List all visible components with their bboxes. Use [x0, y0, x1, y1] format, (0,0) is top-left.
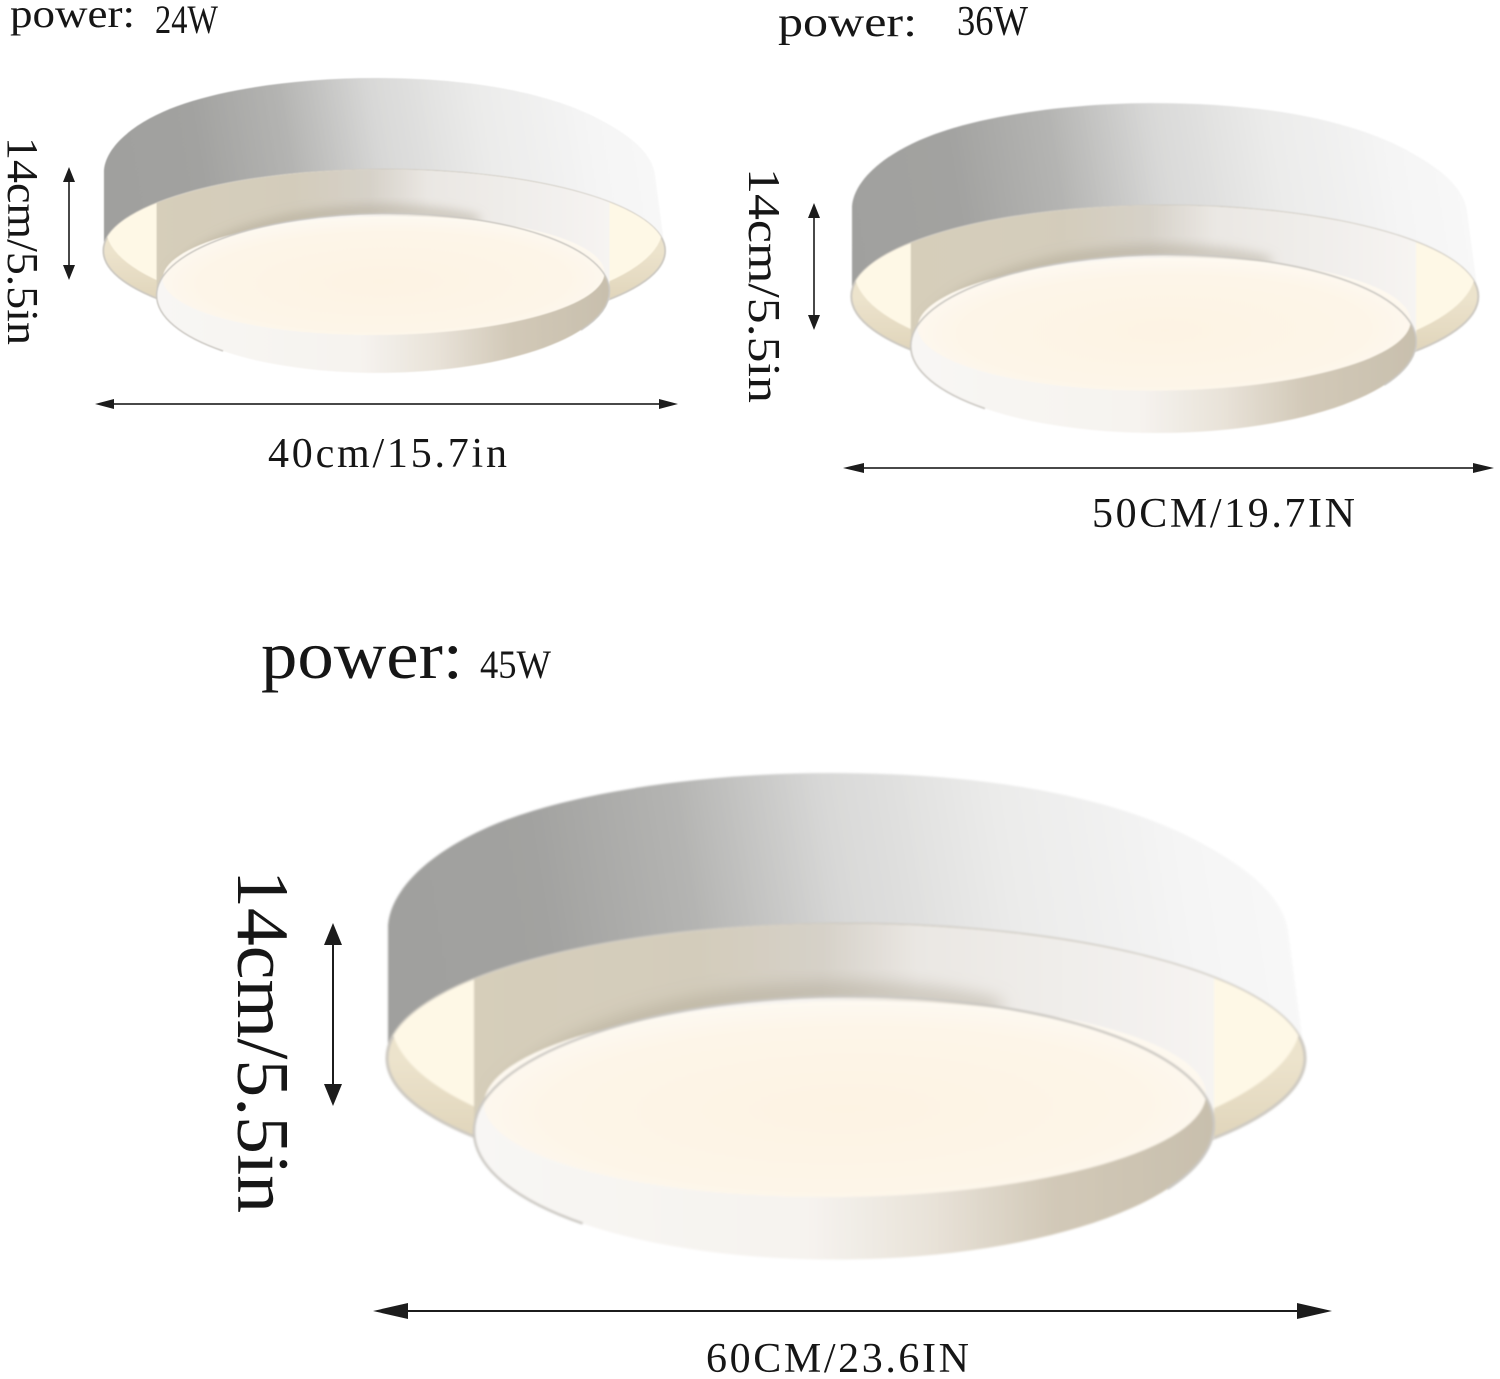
height arrow	[63, 167, 75, 280]
power label 45W: power:	[261, 617, 463, 693]
height arrow	[808, 203, 820, 330]
width arrow	[843, 463, 1494, 473]
lamp image small	[103, 78, 665, 375]
width label: 50CM/19.7IN	[1092, 491, 1355, 537]
height arrow	[324, 923, 342, 1106]
power label 24W	[10, 0, 218, 42]
lamp image medium	[851, 103, 1478, 436]
width label: 40cm/15.7in	[268, 431, 507, 477]
width arrow	[373, 1303, 1332, 1319]
power label 36W	[778, 0, 1028, 46]
power label 36W: power:	[778, 0, 917, 46]
lamp image large	[387, 773, 1305, 1263]
power label 36W: 36W	[957, 0, 1028, 45]
power label 45W: 45W	[480, 642, 551, 687]
panel: 24W lamp	[0, 0, 678, 477]
height label: 14cm/5.5in	[221, 870, 303, 1213]
width arrow	[95, 399, 678, 409]
power label 45W	[261, 617, 551, 693]
height label: 14cm/5.5in	[739, 168, 790, 403]
panel: 36W lamp	[739, 0, 1494, 537]
panel: 45W lamp	[221, 617, 1332, 1379]
